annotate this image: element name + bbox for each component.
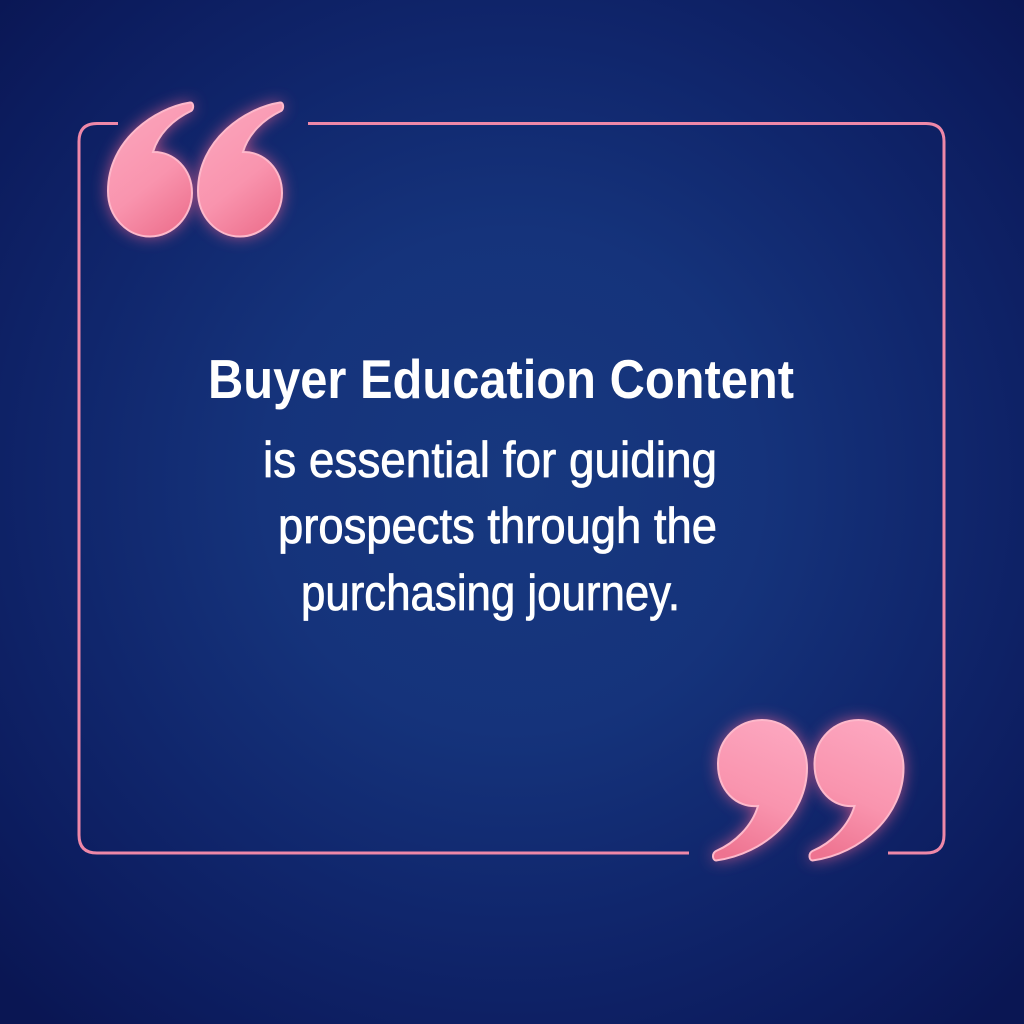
quote body text: is essential for guiding — [263, 432, 717, 488]
quote body text: purchasing journey. — [301, 565, 680, 621]
quote body text: prospects through the — [278, 498, 717, 554]
quote body text — [263, 432, 717, 621]
icon: closing quotation mark — [713, 720, 904, 860]
heading: Buyer Education Content — [208, 348, 794, 410]
quote frame — [79, 124, 944, 853]
icon: opening quotation mark — [108, 102, 283, 236]
